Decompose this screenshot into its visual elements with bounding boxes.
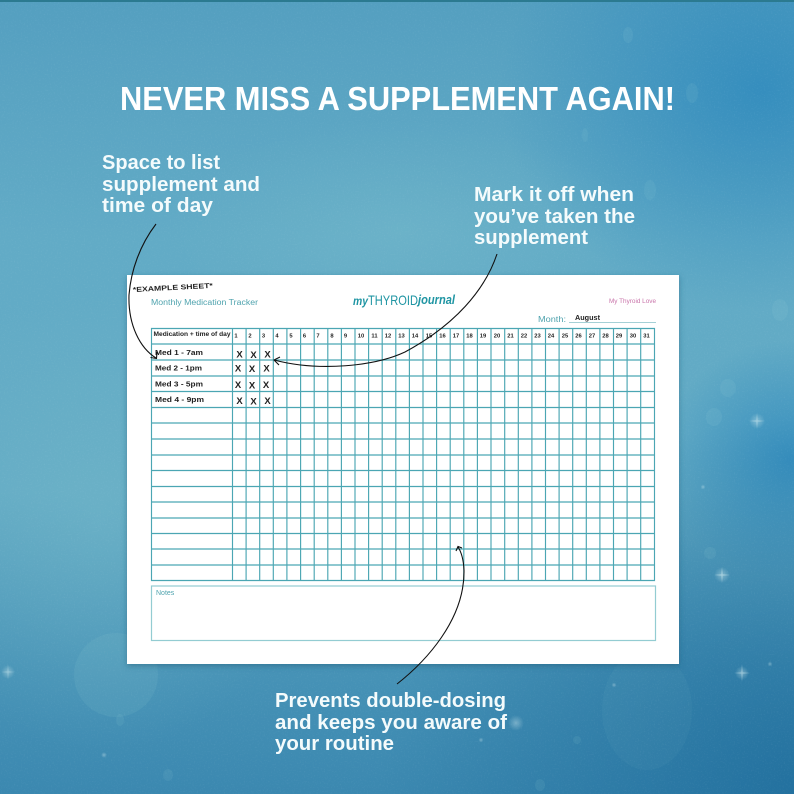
callout: mark it off: supplement [474,227,588,249]
brand label: My Thyroid Love [609,298,656,305]
day numbers: 25 [562,334,569,340]
logo [353,292,455,308]
callout: prevents double-dosing: your routine [275,733,394,755]
check marks: X [235,364,242,374]
day numbers: 6 [303,334,307,340]
day numbers: 10 [358,334,364,340]
day numbers: 3 [262,334,266,340]
day numbers: 7 [316,334,320,340]
callout: prevents double-dosing: and keeps you aware of [275,712,507,734]
check marks: X [250,396,257,408]
sparkles [1,413,772,758]
arrow: to check marks [274,254,497,366]
day numbers: 24 [548,334,555,340]
day numbers: 19 [480,334,487,340]
title: NEVER MISS A SUPPLEMENT AGAIN! [120,80,675,117]
arrow: to empty grid [397,546,464,684]
check marks [235,350,271,408]
day numbers: 22 [521,334,527,340]
day numbers: 31 [643,334,650,340]
logo: my [353,294,369,308]
day numbers: 27 [589,334,595,340]
month field [538,313,656,324]
callout: mark it off: you’ve taken the [474,206,635,228]
day numbers: 20 [494,334,500,340]
callout: space to list: time of day [102,195,214,217]
month field: Month: [538,314,566,324]
arrow: to medication list [129,224,157,358]
day numbers: 5 [289,334,293,340]
example sheet note: *EXAMPLE SHEET* [133,283,213,294]
day numbers: 17 [453,334,459,340]
check marks: X [249,380,256,392]
sheet heading: Monthly Medication Tracker [151,298,258,307]
logo: THYROID [368,292,418,308]
column header: Medication + time of day [154,331,231,338]
medication names [155,350,204,404]
day numbers: 23 [534,334,541,340]
day numbers: 8 [330,334,334,340]
logo: journal [416,292,455,307]
day numbers: 18 [466,334,473,340]
check marks: X [263,364,270,374]
check marks: X [249,364,256,375]
check marks: X [236,350,243,360]
day numbers: 1 [234,334,238,340]
callout: space to list: supplement and [102,174,260,196]
callout: mark it off: Mark it off when [474,184,634,206]
check marks: X [264,350,271,360]
day numbers: 15 [426,334,433,340]
callout: space to list [102,152,260,217]
medication names: Med 1 - 7am [155,350,203,357]
callout: mark it off [474,184,635,249]
medication names: Med 3 - 5pm [155,382,203,388]
callout: prevents double-dosing: Prevents double-dosing [275,690,506,712]
notes box: Notes [156,590,175,597]
check marks: X [250,350,257,361]
callout: space to list: Space to list [102,152,220,174]
day numbers [234,334,650,340]
day numbers: 13 [398,334,405,340]
day numbers: 9 [344,334,348,340]
day numbers: 4 [275,334,279,340]
medication names: Med 4 - 9pm [155,397,204,404]
day numbers: 29 [616,334,623,340]
notes box [152,586,656,640]
day numbers: 14 [412,334,419,340]
day numbers: 21 [507,334,514,340]
day numbers: 26 [575,334,582,340]
day numbers: 30 [630,334,636,340]
callout: prevents double-dosing [275,690,507,755]
check marks: X [236,396,243,407]
check marks: X [235,380,242,391]
panel: tracker sheet [127,224,679,684]
check marks: X [263,380,270,391]
day numbers: 2 [248,334,252,340]
medication names: Med 2 - 1pm [155,366,202,372]
check marks: X [264,396,271,407]
month field: August [575,313,600,322]
day numbers: 16 [439,334,446,340]
day numbers: 28 [602,334,609,340]
day numbers: 12 [385,334,391,340]
tracker grid [152,328,654,580]
day numbers: 11 [371,334,378,340]
